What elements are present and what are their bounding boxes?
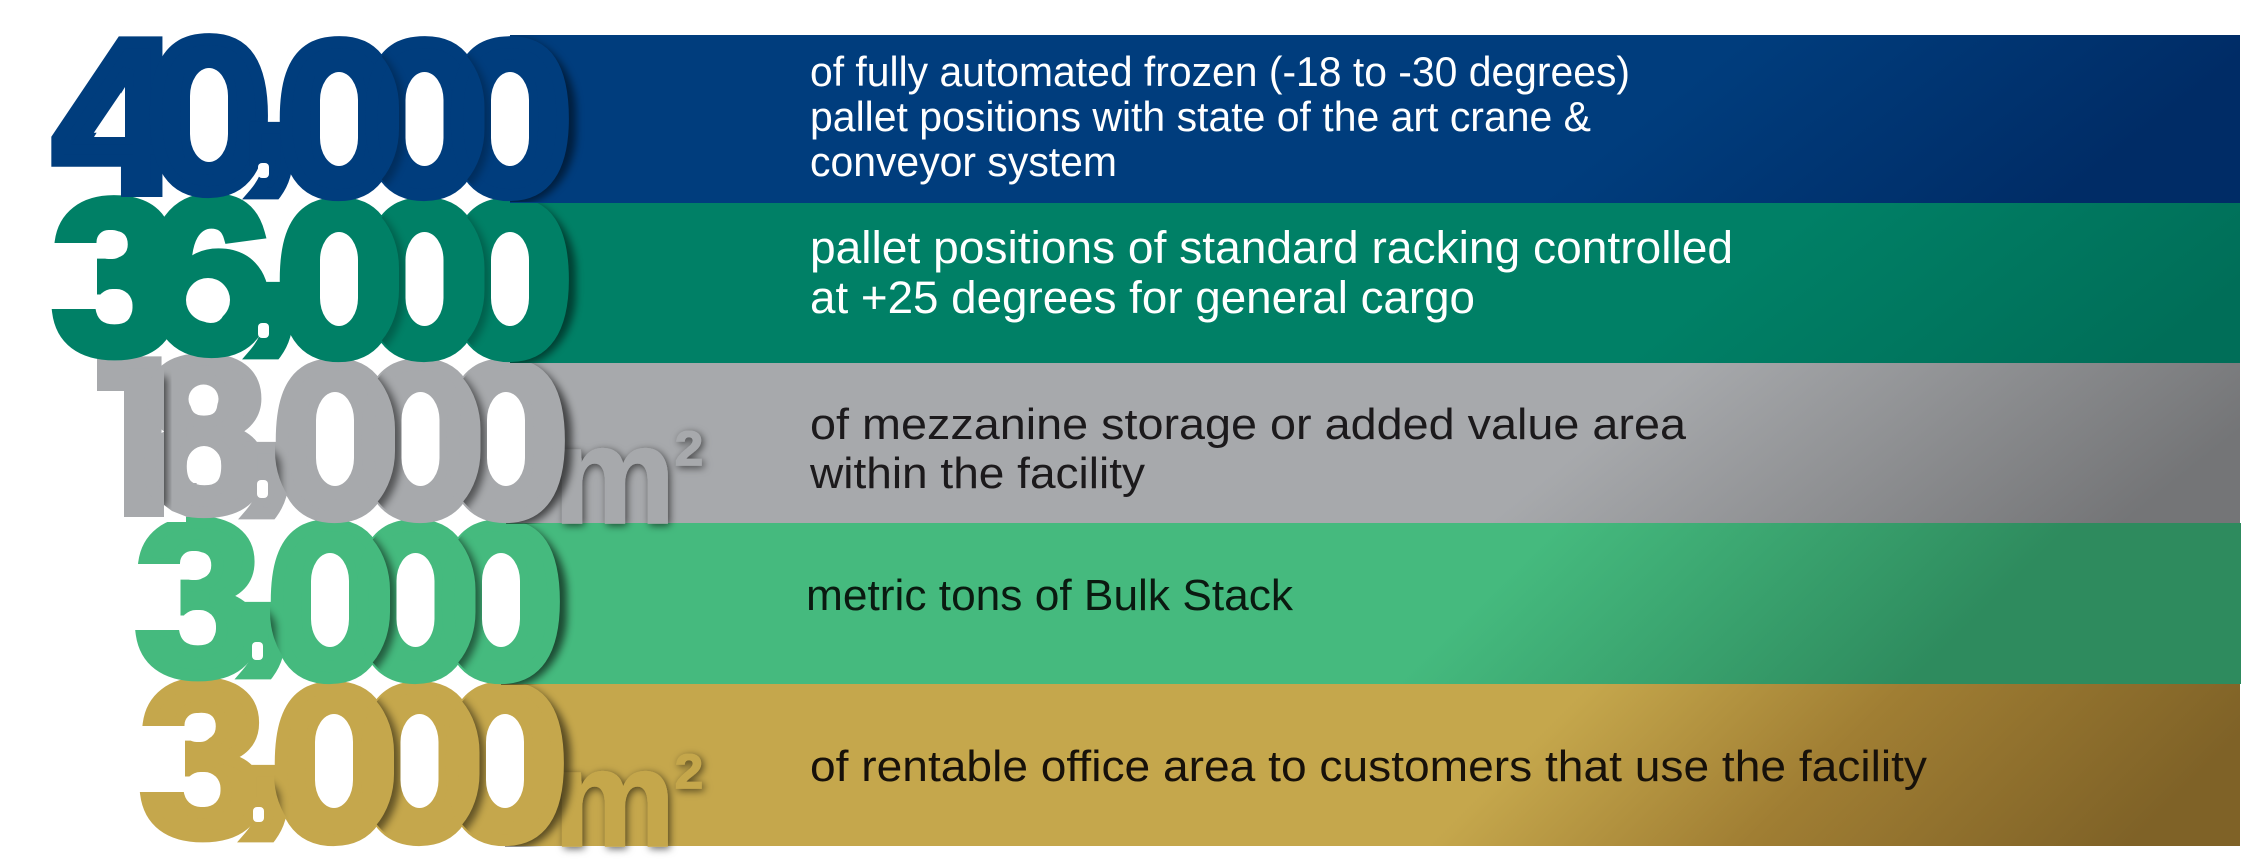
white trim left of the 1 stem — [50, 355, 124, 523]
big number: 3,000: 3,000 — [137, 446, 563, 722]
big number: 3,000 — [135, 517, 572, 685]
description: frozen positions: conveyor system — [810, 138, 1117, 185]
unit: m squared: 2 — [675, 746, 703, 799]
big number: 36,000: 36,000 — [53, 126, 572, 400]
description: racking: at +25 degrees for general cargo — [810, 272, 1475, 323]
row 2: 36,000 standard racking — [45, 126, 2240, 400]
description: frozen positions: of fully automated frozen (-18 to -30 degrees) — [810, 48, 1630, 95]
counter of the 6 — [186, 278, 230, 322]
row 1: 40,000 frozen pallet positions — [51, 33, 2240, 203]
band: gold — [504, 684, 2240, 846]
white trim right of the 1 base — [164, 505, 186, 522]
description: racking: pallet positions of standard racking controlled — [810, 222, 1733, 273]
description: frozen positions: pallet positions with state of the art crane & — [810, 93, 1591, 140]
description: mezzanine: within the facility — [809, 449, 1145, 498]
big number: 18,000 — [97, 354, 578, 524]
big number: 18,000: 18,000 — [73, 286, 568, 561]
row 5: 3,000 m2 rentable office area — [133, 609, 2240, 861]
band: teal — [510, 203, 2240, 363]
flag of the 1 — [97, 357, 127, 391]
counters of the 8 — [187, 384, 221, 482]
counter of the 4 — [94, 87, 125, 137]
row 4: 3,000 metric tons — [128, 446, 2241, 722]
band: grey — [505, 362, 2240, 523]
row 3: 18,000 m2 mezzanine — [50, 286, 2240, 561]
band: light green — [507, 523, 2241, 684]
unit: m squared: m — [553, 399, 676, 553]
description: rentable office: of rentable office area to customers that use the facility — [810, 742, 1927, 791]
unit: m squared: 2 — [675, 423, 703, 476]
band: navy — [510, 35, 2240, 203]
description: mezzanine: of mezzanine storage or added value area — [810, 400, 1687, 449]
shadow of the 1 on the 8 — [164, 372, 172, 509]
description: bulk stack: metric tons of Bulk Stack — [806, 571, 1294, 620]
big number: 40,000 — [51, 33, 580, 202]
big number: 36,000 — [52, 195, 580, 363]
big number: 3,000 — [140, 678, 576, 847]
